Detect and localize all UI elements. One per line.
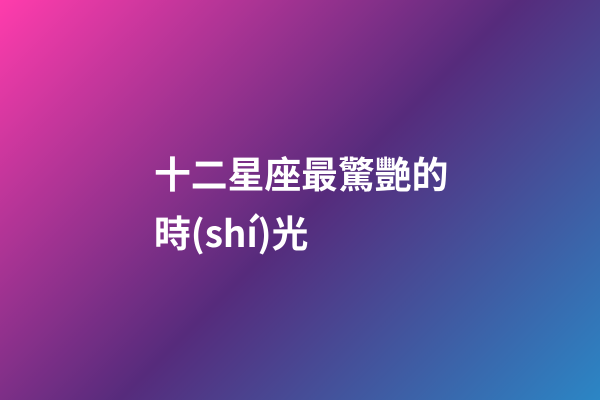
title <box>154 145 448 258</box>
title: 十二星座最驚艷的 <box>154 145 448 199</box>
title: 時(shí)光 <box>154 204 308 258</box>
